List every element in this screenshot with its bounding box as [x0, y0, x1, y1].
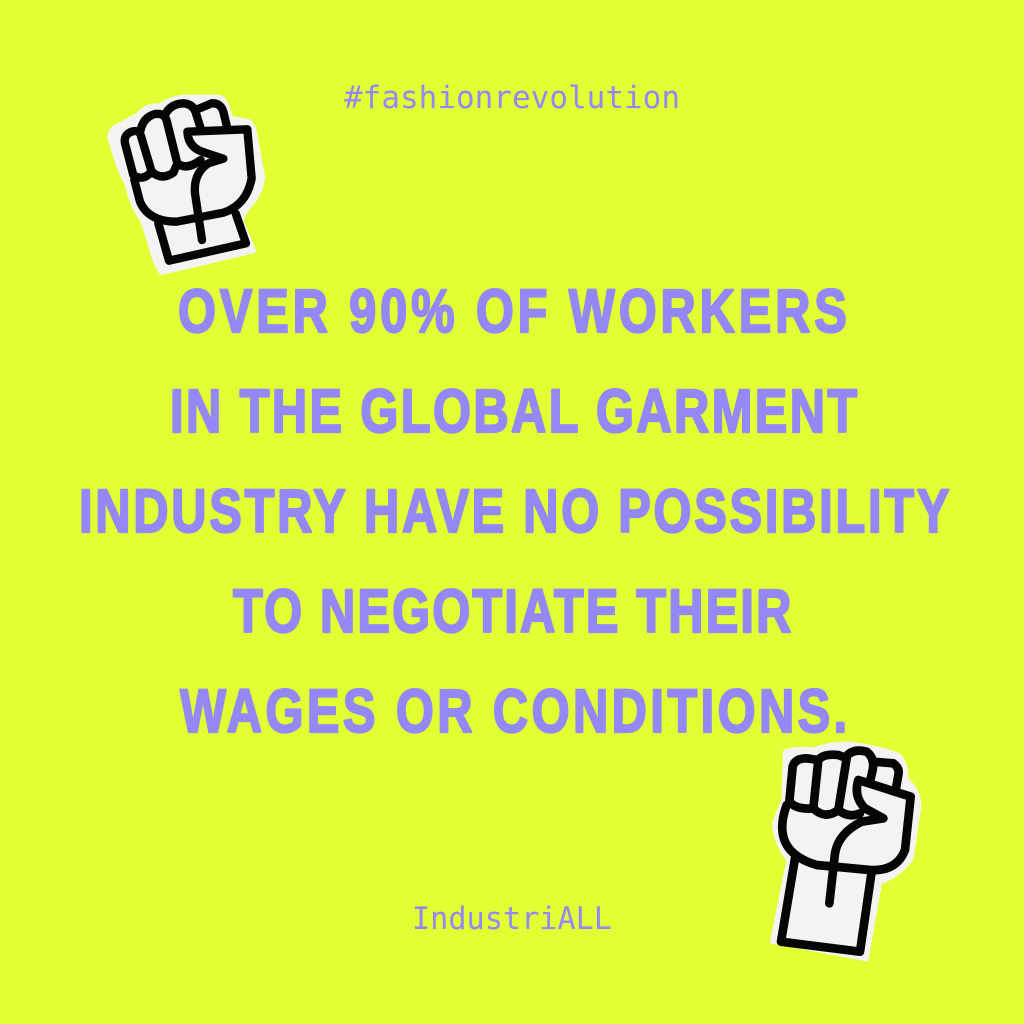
line 1: OVER 90% OF WORKERS — [178, 277, 847, 345]
line 3: INDUSTRY HAVE NO POSSIBILITY — [79, 477, 949, 545]
line 2: IN THE GLOBAL GARMENT — [170, 377, 857, 445]
main statement — [79, 277, 949, 745]
icon: raised fist sticker bottom right — [772, 743, 919, 959]
source label: IndustriALL — [412, 901, 612, 937]
hashtag heading: #fashionrevolution — [344, 80, 680, 116]
line 4: TO NEGOTIATE THEIR — [233, 577, 791, 645]
icon: raised fist sticker top left — [110, 97, 262, 272]
line 5: WAGES OR CONDITIONS. — [180, 677, 847, 745]
